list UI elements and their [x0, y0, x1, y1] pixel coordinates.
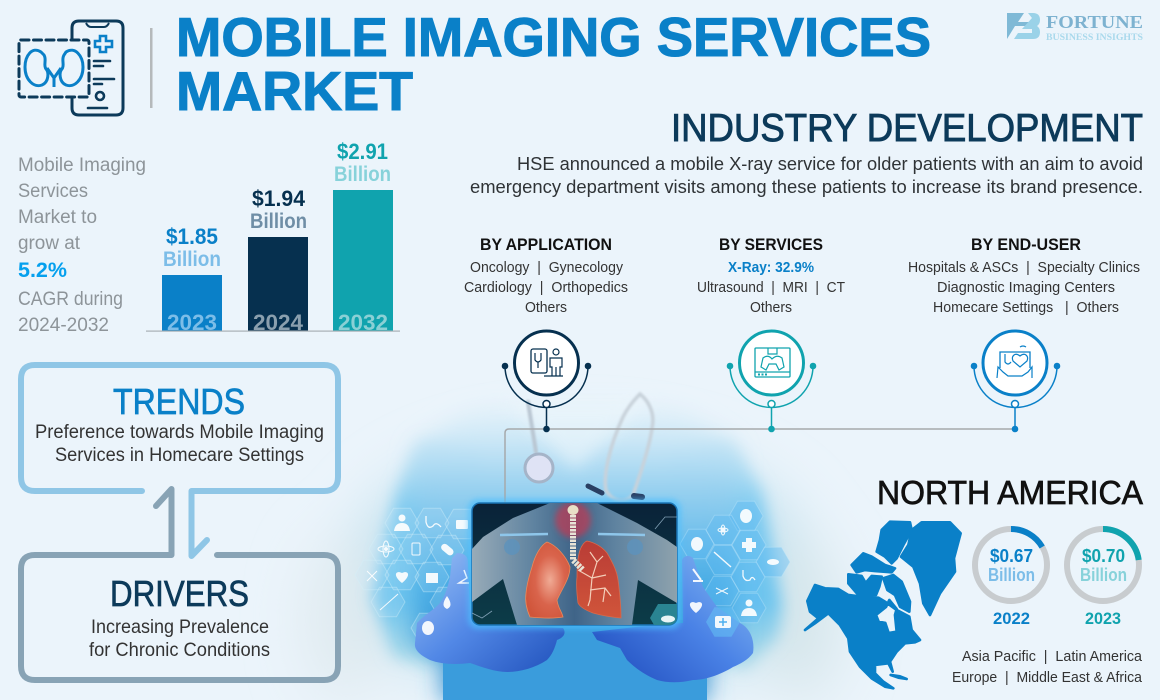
Greenland [901, 522, 961, 615]
bar 2032: Billion [334, 163, 391, 186]
icon: end-user badge [971, 331, 1060, 432]
photo glow backdrop [320, 461, 844, 696]
icon: application badge [502, 331, 591, 432]
title: MARKET [176, 60, 413, 122]
trends description [35, 422, 324, 466]
hexagon overlay on right glove [706, 607, 740, 637]
chart baseline [146, 330, 400, 332]
central arctic islands [852, 553, 895, 572]
donut: 2023: $0.70 [1082, 546, 1125, 566]
phone speaker [86, 23, 109, 27]
bar 2023: 2023 [167, 310, 217, 335]
panel: trends [21, 365, 338, 556]
report dot [96, 92, 104, 100]
industry development text: emergency department visits among these patients to increase its brand presence. [470, 177, 1143, 197]
right glove [592, 556, 753, 682]
connector frame [505, 429, 1014, 503]
phone outline [72, 21, 123, 115]
segment: by services: Others [750, 299, 792, 316]
bar 2024: 2024 [253, 310, 304, 335]
bar 2024: Billion [250, 210, 307, 233]
segment: by application: Oncology | Gynecology [470, 259, 623, 276]
right lung [577, 541, 621, 618]
right sleeve [718, 442, 792, 674]
bar 2023: Billion [163, 248, 221, 271]
bar 2032 [333, 139, 393, 335]
screen callout lines [472, 517, 677, 618]
bar 2024: $1.94 [252, 186, 306, 211]
panel: drivers [21, 489, 338, 680]
bar 2032: 2032 [338, 310, 388, 335]
drivers description: Increasing Prevalence [91, 617, 269, 638]
report lines [88, 61, 114, 108]
segment: by application: BY APPLICATION [480, 235, 612, 254]
left sleeve [364, 442, 439, 670]
bar 2032: $2.91 [337, 139, 388, 164]
collar bones [500, 534, 645, 535]
trends heading: TRENDS [113, 381, 245, 422]
CAGR text block: Mobile Imaging [18, 155, 146, 176]
segment: by end-user: Diagnostic Imaging Centers [937, 279, 1115, 296]
left medical icon hexagons [369, 508, 472, 637]
CAGR text block: Market to [18, 207, 97, 228]
logo wordmark: FORTUNE [1046, 12, 1143, 32]
drivers description: for Chronic Conditions [89, 640, 270, 661]
donut: 2022: Billion [988, 565, 1035, 585]
bronchi [578, 552, 611, 606]
logo tagline: BUSINESS INSIGHTS [1046, 32, 1143, 42]
left glove [415, 553, 565, 672]
title [176, 6, 931, 122]
segment: by end-user: Homecare Settings | Others [933, 299, 1119, 316]
heading: industry development: INDUSTRY DEVELOPMENT [671, 107, 1143, 150]
CAGR text block: Services [18, 181, 88, 202]
other regions [952, 648, 1143, 686]
left lung [526, 542, 570, 618]
throat glow [555, 502, 591, 538]
logo mark F [1007, 13, 1030, 39]
header icon: phone with kidneys [19, 21, 123, 115]
stethoscope [525, 394, 653, 500]
larynx [568, 505, 578, 515]
CAGR text block: grow at [18, 233, 81, 254]
CAGR text block: CAGR during [18, 289, 123, 310]
left icons [398, 514, 406, 522]
Baffin island [883, 575, 910, 612]
neck highlight [534, 412, 620, 471]
trends description: Services in Homecare Settings [55, 445, 304, 466]
segment: by services: X-Ray: 32.9% [728, 259, 814, 276]
medical plus [95, 36, 112, 52]
segment: by application [464, 235, 628, 316]
trachea [573, 508, 583, 570]
logo mark B [1014, 13, 1040, 39]
Ellesmere [877, 522, 912, 563]
CAGR text block: 2024-2032 [18, 315, 109, 336]
dashed scan frame [19, 40, 89, 97]
eye icon [661, 616, 675, 622]
segment: by end-user [908, 235, 1140, 316]
donut: 2023: Billion [1080, 565, 1127, 585]
x-ray body [472, 503, 677, 625]
Caribbean islands [891, 675, 907, 679]
scrubs lower panel [443, 663, 707, 700]
right medical icon hexagons [680, 501, 790, 623]
segment: by end-user: BY END-USER [971, 235, 1081, 254]
right icons [740, 509, 752, 523]
drivers description [89, 617, 270, 661]
header divider [150, 28, 152, 108]
Victoria and Banks islands [848, 574, 882, 595]
segment: by services: Ultrasound | MRI | CT [697, 279, 845, 296]
industry development text [470, 154, 1143, 197]
segment: by services [697, 235, 845, 316]
donut: 2023 [1067, 529, 1139, 628]
other regions: Europe | Middle East & Africa [952, 669, 1143, 686]
photo: clinician holding tablet [305, 394, 1014, 700]
kidneys [25, 50, 83, 87]
icon: services badge [727, 331, 816, 432]
bar 2023: $1.85 [166, 224, 218, 249]
bar 2023 [162, 224, 222, 335]
donut: 2022: 2022 [993, 609, 1030, 628]
tablet glow [468, 499, 681, 629]
segment: by application: Cardiology | Orthopedics [464, 279, 628, 296]
white medical icons [367, 509, 779, 635]
drivers heading: DRIVERS [110, 573, 249, 614]
tablet screen [472, 503, 677, 625]
CAGR text block: 5.2% [18, 259, 67, 282]
scrubs torso [415, 410, 735, 700]
trends outline with arrow [21, 365, 338, 556]
heading: north america: NORTH AMERICA [877, 474, 1143, 511]
title: MOBILE IMAGING SERVICES [176, 6, 931, 68]
trends description: Preference towards Mobile Imaging [35, 422, 324, 443]
bar 2024 [248, 186, 308, 335]
donut: 2023: 2023 [1085, 609, 1121, 628]
donut: 2022: $0.67 [990, 546, 1033, 566]
segment: by application: Others [525, 299, 567, 316]
segment: by end-user: Hospitals & ASCs | Specialty Clinics [908, 259, 1140, 276]
industry development text: HSE announced a mobile X-ray service for older patients with an aim to avoid [517, 154, 1143, 174]
other regions: Asia Pacific | Latin America [962, 648, 1143, 665]
drivers outline with arrow [21, 489, 338, 680]
eye hexagon on tablet [650, 604, 677, 625]
segment: by services: BY SERVICES [719, 235, 823, 254]
map: North America [805, 522, 961, 688]
bar chart: market size [146, 139, 400, 335]
CAGR text block [18, 155, 146, 336]
logo: Fortune Business Insights [1007, 12, 1143, 42]
tablet with lung x-ray [468, 499, 686, 632]
mainland with Hudson Bay [805, 585, 920, 688]
donut: 2022 [975, 529, 1047, 628]
